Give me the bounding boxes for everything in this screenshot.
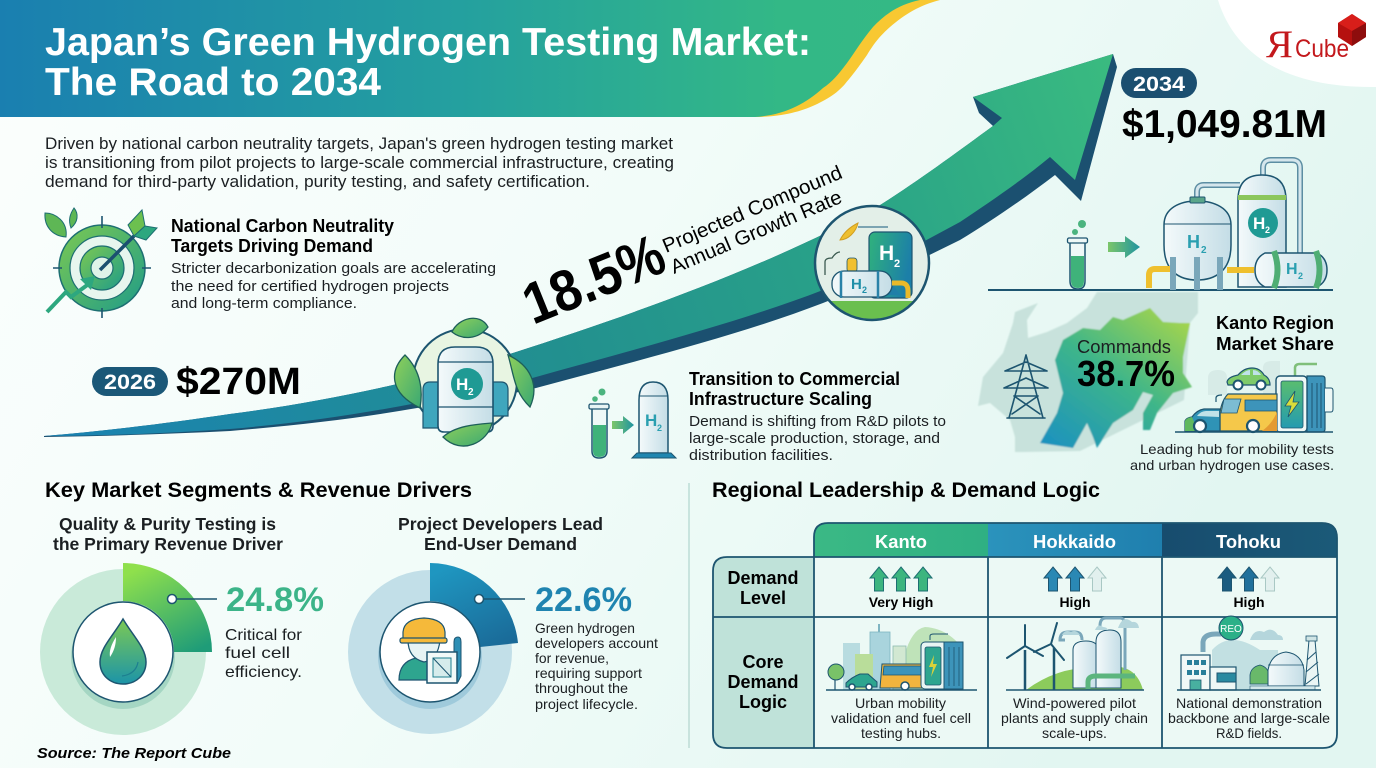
quality stat: 24.8% bbox=[226, 581, 324, 619]
heading: regional leadership: Regional Leadership & Demand Logic bbox=[712, 478, 1100, 502]
icon: hydrogen tank with leaves bbox=[395, 318, 534, 446]
row header column bbox=[713, 557, 814, 748]
Kanto hub caption: Leading hub for mobility tests bbox=[1140, 441, 1334, 457]
icon: hydrogen plant: H bbox=[1253, 214, 1265, 233]
cell text: Hokkaido logic: scale-ups. bbox=[1042, 725, 1107, 741]
icon: hydrogen plant: 2 bbox=[1298, 271, 1303, 281]
header banner bbox=[0, 0, 940, 117]
Kanto hub caption bbox=[1130, 441, 1334, 473]
icon: wind and pilot plant bbox=[1006, 618, 1144, 690]
developers stat: 22.6% bbox=[535, 581, 632, 619]
cell text: Kanto logic: testing hubs. bbox=[861, 725, 941, 741]
2034 value bbox=[1121, 68, 1327, 146]
transition text: large-scale production, storage, and bbox=[689, 430, 940, 447]
cell text: Tohoku logic bbox=[1168, 695, 1330, 741]
cell text: Hokkaido logic: plants and supply chain bbox=[1001, 710, 1148, 726]
header: Hokkaido bbox=[988, 523, 1162, 557]
title: Japan’s Green Hydrogen Testing Market: bbox=[45, 21, 811, 64]
intro paragraph: Driven by national carbon neutrality targets, Japan's green hydrogen testing market bbox=[45, 134, 673, 153]
icon: hydrogen plant: H bbox=[1187, 232, 1200, 252]
header: Tohoku bbox=[1162, 523, 1337, 557]
icon: tube to tank bbox=[589, 382, 676, 458]
cell text: Hokkaido logic: Wind-powered pilot bbox=[1013, 695, 1136, 711]
quality heading: the Primary Revenue Driver bbox=[53, 534, 283, 554]
header: Kanto: Kanto bbox=[875, 532, 927, 552]
label: high (Hokkaido): High bbox=[1059, 594, 1091, 610]
table body bbox=[713, 523, 1337, 748]
donut chart: quality testing bbox=[40, 563, 217, 735]
icon: hydrogen tank with leaves: H bbox=[456, 375, 468, 394]
header: Kanto bbox=[814, 523, 988, 557]
title: The Road to 2034 bbox=[45, 61, 381, 104]
row label: core demand logic: Core bbox=[742, 652, 784, 672]
developers stat: project lifecycle. bbox=[535, 696, 638, 712]
icon: transmission tower bbox=[1004, 355, 1048, 418]
icon: target bbox=[45, 208, 157, 318]
icon: water drop bbox=[100, 619, 146, 684]
demand arrows: Kanto bbox=[870, 567, 932, 591]
developers stat: requiring support bbox=[535, 665, 642, 681]
developers heading: End-User Demand bbox=[424, 534, 577, 554]
2034 value: 2034 bbox=[1133, 73, 1185, 96]
national carbon neutrality text: National Carbon Neutrality bbox=[171, 216, 394, 236]
icon: hydrogen plant: H bbox=[1286, 261, 1298, 278]
developers heading bbox=[398, 514, 603, 554]
label: very high: Very High bbox=[869, 594, 933, 610]
developers stat: developers account bbox=[535, 635, 658, 651]
row label: demand level bbox=[727, 568, 799, 608]
icon: infrastructure circle: 2 bbox=[894, 258, 900, 270]
2026 value: $270M bbox=[176, 361, 301, 403]
cell text: Tohoku logic: National demonstration bbox=[1176, 695, 1322, 711]
icon: infrastructure circle: H bbox=[879, 242, 894, 265]
cell text: Kanto logic bbox=[831, 695, 971, 741]
label: high (Tohoku): High bbox=[1233, 594, 1265, 610]
icon: hydrogen plant: 2 bbox=[1201, 245, 1207, 256]
cell text: Tohoku logic: R&D fields. bbox=[1216, 725, 1282, 741]
icon: urban mobility bbox=[826, 624, 977, 690]
logo badge: Cube bbox=[1295, 35, 1349, 63]
cell text: Kanto logic: Urban mobility bbox=[855, 695, 946, 711]
quality heading: Quality & Purity Testing is bbox=[59, 514, 276, 534]
Kanto hub caption: and urban hydrogen use cases. bbox=[1130, 457, 1334, 473]
donut chart: project developers bbox=[348, 563, 525, 734]
icon: tube to tank: 2 bbox=[657, 423, 662, 433]
transition text: distribution facilities. bbox=[689, 447, 833, 464]
row label: demand level: Demand bbox=[727, 568, 799, 588]
regional table bbox=[713, 523, 1337, 748]
icon: tube to tank: H bbox=[645, 411, 657, 430]
quality stat: Critical for bbox=[225, 627, 303, 644]
Kanto share callout: 38.7% bbox=[1077, 353, 1175, 394]
icon: national demonstration site bbox=[1177, 616, 1321, 690]
national carbon neutrality text: and long-term compliance. bbox=[171, 295, 357, 312]
row label: core demand logic: Logic bbox=[739, 692, 787, 712]
icon: national demonstration site: REO bbox=[1220, 624, 1242, 635]
icon: hydrogen tank with leaves: 2 bbox=[468, 387, 474, 398]
row label: core demand logic bbox=[727, 652, 799, 712]
CAGR callout: Projected Compound bbox=[659, 162, 846, 258]
demand arrows: Tohoku bbox=[1218, 567, 1279, 591]
icon: infrastructure circle: H bbox=[851, 276, 862, 293]
row label: core demand logic: Demand bbox=[727, 672, 799, 692]
icon: hydrogen plant bbox=[988, 160, 1333, 290]
developers heading: Project Developers Lead bbox=[398, 514, 603, 534]
2034 value: $1,049.81M bbox=[1122, 103, 1327, 146]
header: Tohoku: Tohoku bbox=[1216, 532, 1281, 552]
cell text: Tohoku logic: backbone and large-scale bbox=[1168, 710, 1330, 726]
row label: demand level: Level bbox=[740, 588, 786, 608]
growth arrow bbox=[44, 54, 1117, 437]
CAGR callout bbox=[514, 162, 846, 337]
source note: Source: The Report Cube bbox=[37, 745, 231, 762]
intro paragraph: is transitioning from pilot projects to large-scale commercial infrastructure, creating bbox=[45, 153, 674, 172]
intro paragraph bbox=[45, 134, 674, 191]
developers stat: Green hydrogen bbox=[535, 620, 635, 636]
demand arrows: Hokkaido bbox=[1044, 567, 1106, 591]
CAGR callout: 18.5% bbox=[514, 222, 674, 337]
Kanto share callout: Market Share bbox=[1216, 334, 1334, 354]
quality stat: fuel cell bbox=[225, 645, 290, 662]
developers stat: for revenue, bbox=[535, 650, 609, 666]
map: Japan region bbox=[978, 292, 1198, 452]
icon: engineer with blueprint bbox=[399, 618, 461, 683]
transition text: Transition to Commercial bbox=[689, 369, 900, 389]
national carbon neutrality text: the need for certified hydrogen projects bbox=[171, 278, 449, 295]
logo badge: Я bbox=[1266, 23, 1293, 66]
Kanto share callout: Kanto Region bbox=[1216, 313, 1334, 333]
title bbox=[45, 21, 811, 104]
2026 value: 2026 bbox=[104, 371, 156, 394]
quality stat bbox=[225, 581, 324, 681]
2026 value bbox=[92, 361, 301, 403]
icon: infrastructure circle bbox=[810, 206, 935, 326]
intro paragraph: demand for third-party validation, purity testing, and safety certification. bbox=[45, 172, 590, 191]
icon: vehicles and charger bbox=[1175, 361, 1333, 432]
icon: hydrogen plant: 2 bbox=[1265, 225, 1270, 235]
quality stat: efficiency. bbox=[225, 664, 302, 681]
CAGR callout: Annual Growth Rate bbox=[667, 186, 845, 279]
transition text: Demand is shifting from R&D pilots to bbox=[689, 413, 946, 430]
Kanto share callout: Commands bbox=[1077, 336, 1171, 357]
header: Hokkaido: Hokkaido bbox=[1033, 532, 1116, 552]
developers stat: throughout the bbox=[535, 680, 628, 696]
transition text: Infrastructure Scaling bbox=[689, 389, 872, 409]
national carbon neutrality text: Targets Driving Demand bbox=[171, 236, 373, 256]
cell text: Kanto logic: validation and fuel cell bbox=[831, 710, 971, 726]
cell text: Hokkaido logic bbox=[1001, 695, 1148, 741]
quality heading bbox=[53, 514, 283, 554]
Kanto share callout bbox=[1077, 313, 1334, 394]
logo badge bbox=[1218, 0, 1376, 87]
national carbon neutrality text: Stricter decarbonization goals are accelerating bbox=[171, 260, 496, 277]
heading: key market segments: Key Market Segments & Revenue Drivers bbox=[45, 478, 472, 502]
transition text bbox=[689, 369, 946, 464]
national carbon neutrality text bbox=[171, 216, 496, 312]
icon: infrastructure circle: 2 bbox=[862, 285, 867, 295]
developers stat bbox=[535, 581, 658, 712]
